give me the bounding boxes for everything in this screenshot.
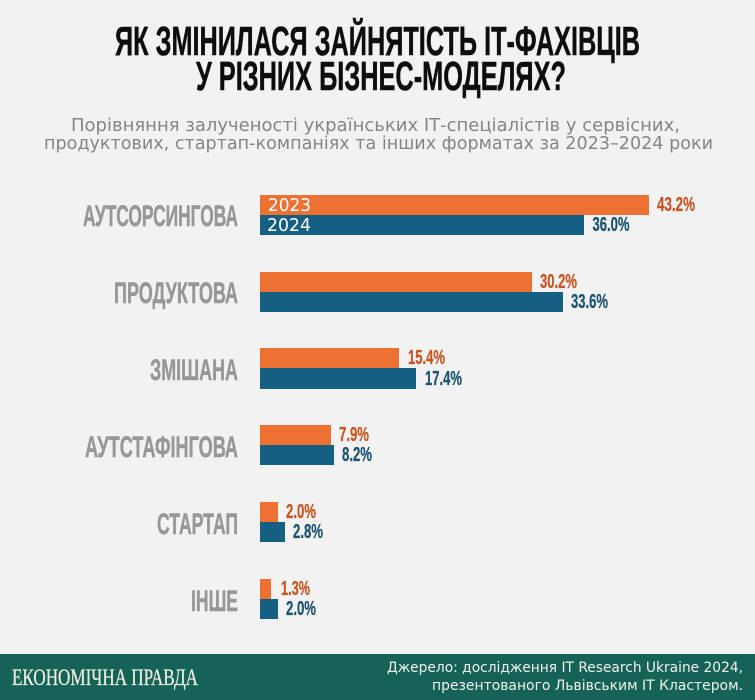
row: стартап: СТАРТАП — [157, 508, 238, 541]
row: змішана: ЗМІШАНА — [150, 354, 238, 387]
row: аутстафінгова: 8.2% — [342, 444, 372, 466]
row: змішана: 17.4% — [425, 368, 462, 390]
row: інше: ІНШЕ — [191, 585, 238, 618]
row: продуктова: 30.2% — [540, 271, 577, 293]
row: змішана — [150, 347, 462, 390]
row: аутсорсингова — [83, 194, 695, 236]
row: продуктова — [114, 271, 608, 313]
row: аутстафінгова: АУТСТАФІНГОВА — [85, 431, 238, 464]
row: аутсорсингова: 36.0% — [592, 214, 630, 236]
source: Джерело: дослідження IT Research Ukraine 2024, — [387, 660, 743, 676]
source — [387, 660, 743, 694]
footer — [0, 654, 755, 700]
row: інше: 1.3% — [281, 578, 310, 600]
subtitle: Порівняння залученості українських ІТ-спеціалістів у сервісних, — [71, 116, 680, 136]
row: аутсорсингова: 2023 — [268, 196, 311, 216]
subtitle: продуктових, стартап-компаніях та інших форматах за 2023–2024 роки — [44, 134, 713, 154]
logo: ЕКОНОМІЧНА ПРАВДА — [12, 665, 198, 690]
source: презентованого Львівським ІТ Кластером. — [432, 678, 743, 694]
bar chart — [83, 194, 695, 620]
row: аутсорсингова: АУТСОРСИНГОВА — [83, 200, 238, 233]
row: інше — [191, 578, 316, 620]
row: продуктова: 33.6% — [571, 291, 608, 313]
subtitle — [44, 116, 713, 154]
row: продуктова: ПРОДУКТОВА — [114, 277, 238, 310]
row: стартап: 2.8% — [293, 521, 323, 543]
row: стартап — [157, 501, 323, 543]
row: інше: 2.0% — [286, 598, 316, 620]
title — [115, 18, 640, 99]
row: стартап: 2.0% — [286, 501, 316, 523]
row: аутсорсингова: 2024 — [267, 216, 311, 236]
row: змішана: 15.4% — [408, 347, 445, 369]
row: аутстафінгова — [85, 424, 372, 466]
row: аутстафінгова: 7.9% — [339, 424, 369, 446]
row: аутсорсингова: 43.2% — [657, 194, 695, 216]
